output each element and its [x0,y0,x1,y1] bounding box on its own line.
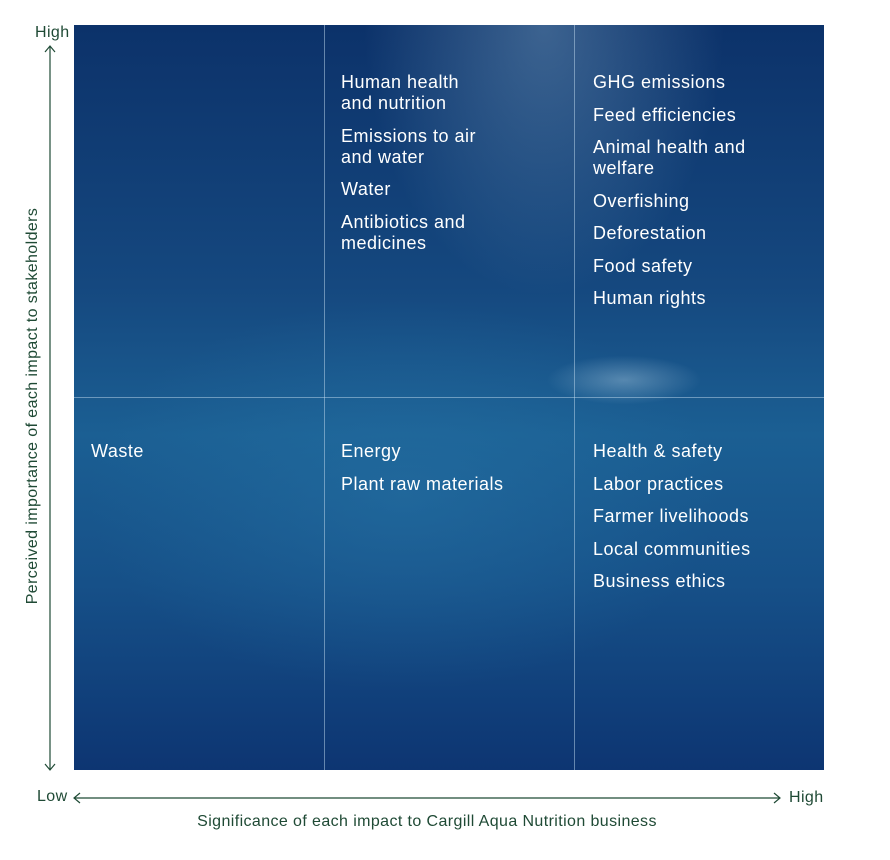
quadrant: high importance, medium significance: Emissions to air [341,126,476,146]
quadrant: high importance, high significance: GHG emissions [593,72,726,92]
quadrant: high importance, high significance: welfare [593,158,655,178]
quadrant: low importance, medium significance: Plant raw materials [341,474,504,494]
x axis title: Significance of each impact to Cargill Aqua Nutrition business [197,813,657,830]
quadrant: low importance, high significance: Farmer livelihoods [593,506,749,526]
quadrant: low importance, high significance: Health & safety [593,441,723,461]
x axis arrow [73,792,781,804]
label: High (x axis): High [789,789,824,806]
quadrant: high importance, medium significance: and water [341,146,425,166]
quadrant: high importance, medium significance [341,72,476,252]
quadrant: high importance, high significance: Deforestation [593,223,707,243]
quadrant: high importance, medium significance: Antibiotics and [341,212,466,232]
quadrant: high importance, medium significance: Water [341,179,391,199]
quadrant: high importance, high significance: Human rights [593,288,706,308]
quadrant: low importance, medium significance: Energy [341,441,401,461]
quadrant: high importance, medium significance: and nutrition [341,93,447,113]
quadrant: low importance, low significance: Waste [91,441,144,461]
quadrant: low importance, high significance: Business ethics [593,571,726,591]
quadrant: high importance, high significance: Overfishing [593,190,690,210]
y axis title: Perceived importance of each impact to stakeholders [24,208,41,604]
label: High (y axis): High [35,24,70,41]
quadrant: high importance, medium significance: Human health [341,72,459,92]
quadrant: low importance, high significance: Labor practices [593,474,724,494]
quadrant: high importance, medium significance: medicines [341,232,427,252]
quadrant: low importance, high significance: Local communities [593,538,751,558]
y axis arrow [44,45,56,771]
quadrant: high importance, high significance [593,72,746,308]
quadrant: high importance, high significance: Feed efficiencies [593,104,736,124]
quadrant: high importance, high significance: Food safety [593,256,693,276]
quadrant: low importance, medium significance [341,441,504,494]
quadrant: high importance, high significance: Animal health and [593,137,746,157]
quadrant: low importance, high significance [593,441,751,591]
matrix panel [74,25,824,770]
label: Low: Low [37,788,68,805]
